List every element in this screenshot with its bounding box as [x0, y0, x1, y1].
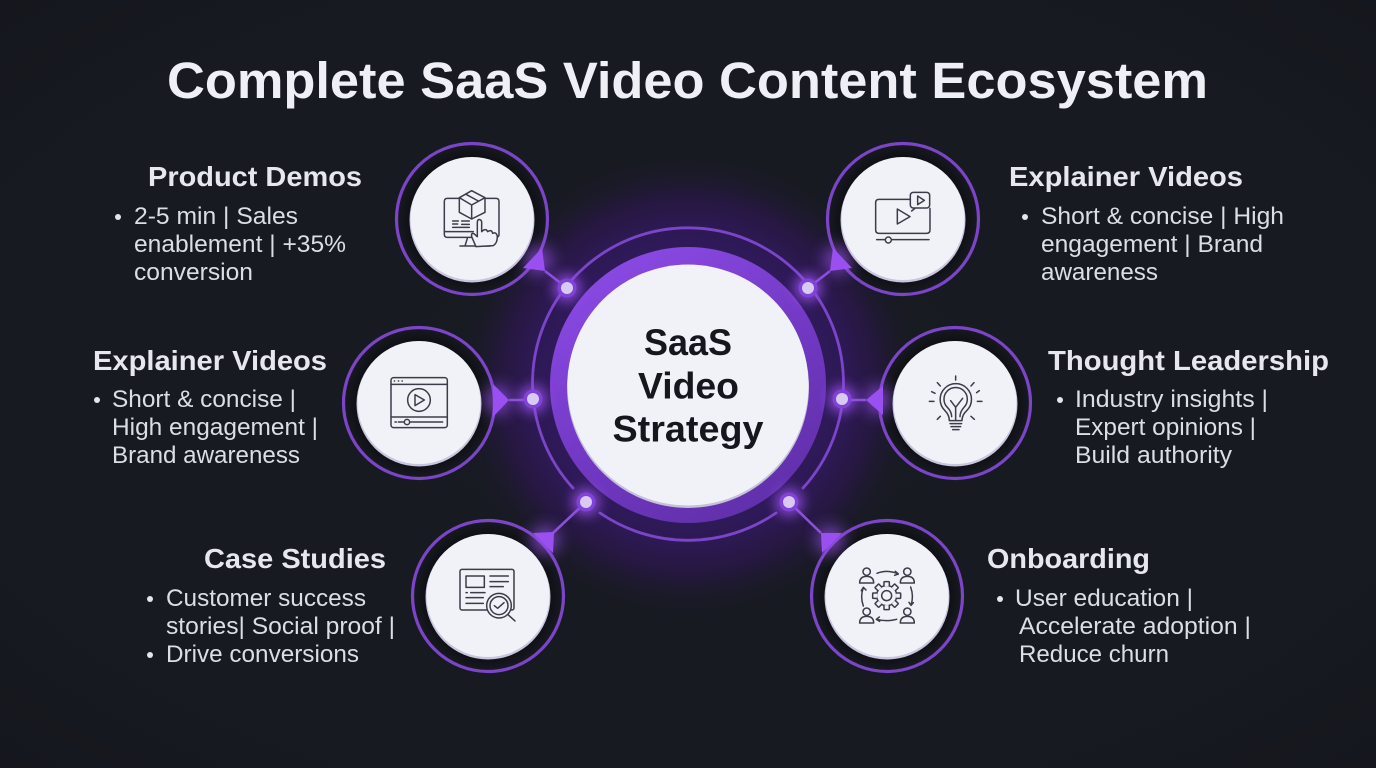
text: product demos: conversion [134, 259, 253, 286]
text: thought leadership: Thought Leadership [1048, 345, 1329, 376]
panel: case studies node [411, 519, 565, 673]
center label: Strategy [612, 408, 764, 450]
panel: onboarding node [810, 519, 964, 673]
text: onboarding: Reduce churn [1019, 641, 1169, 668]
thick purple ring [550, 247, 826, 523]
text: explainer videos left: High engagement | [112, 414, 318, 441]
panel: explainer videos top-right node [826, 142, 980, 296]
panel: explainer videos left node [342, 326, 496, 480]
center white disc [568, 264, 808, 506]
center hub [532, 228, 844, 540]
text: case studies: Case Studies [204, 543, 386, 574]
text: thought leadership: Industry insights | [1075, 386, 1268, 413]
text: case studies: Customer success [166, 585, 366, 612]
text: explainer videos right: Explainer Videos [1009, 161, 1243, 192]
center label [612, 322, 764, 450]
title: Complete SaaS Video Content Ecosystem [167, 52, 1208, 109]
text: onboarding [987, 543, 1251, 668]
icon: video window [391, 378, 447, 428]
text: explainer videos right: Short & concise | High [1041, 203, 1284, 230]
center label: SaaS [644, 322, 732, 363]
text: explainer videos left: Brand awareness [112, 442, 300, 469]
text: case studies [147, 543, 395, 668]
text: explainer videos right [1009, 161, 1284, 286]
text: case studies: stories| Social proof | [166, 613, 395, 640]
outer purple rings of the six nodes [344, 144, 1030, 672]
outer thin segmented ring [532, 228, 844, 540]
text: thought leadership [1048, 345, 1329, 469]
text: product demos: 2-5 min | Sales [134, 203, 298, 230]
text: explainer videos left: Explainer Videos [93, 345, 327, 376]
text: product demos: Product Demos [148, 161, 362, 192]
text: explainer videos left [93, 345, 327, 469]
connection dots [519, 274, 856, 516]
text: product demos [115, 161, 362, 286]
text: thought leadership: Build authority [1075, 442, 1233, 469]
icon: video player with bubble [876, 192, 930, 243]
connectors and callout pointers [484, 246, 892, 554]
text: explainer videos left: Short & concise | [112, 386, 296, 413]
text: onboarding: Accelerate adoption | [1019, 613, 1251, 640]
icon: light bulb [929, 376, 982, 430]
center label: Video [638, 366, 739, 406]
text: explainer videos right: awareness [1041, 259, 1158, 286]
icon: document with magnifier [460, 569, 515, 621]
text: explainer videos right: engagement | Brand [1041, 231, 1263, 258]
text: thought leadership: Expert opinions | [1075, 414, 1256, 441]
text: product demos: enablement | +35% [134, 231, 346, 258]
icon: team cycle with gear [860, 568, 914, 623]
text: case studies: Drive conversions [166, 641, 359, 668]
panel: product demos node [395, 142, 549, 296]
text: onboarding: Onboarding [987, 543, 1150, 574]
icon: monitor with box and pointer [444, 191, 499, 247]
center glow [453, 150, 923, 620]
panel: thought leadership node [878, 326, 1032, 480]
text: onboarding: User education | [1015, 585, 1193, 612]
